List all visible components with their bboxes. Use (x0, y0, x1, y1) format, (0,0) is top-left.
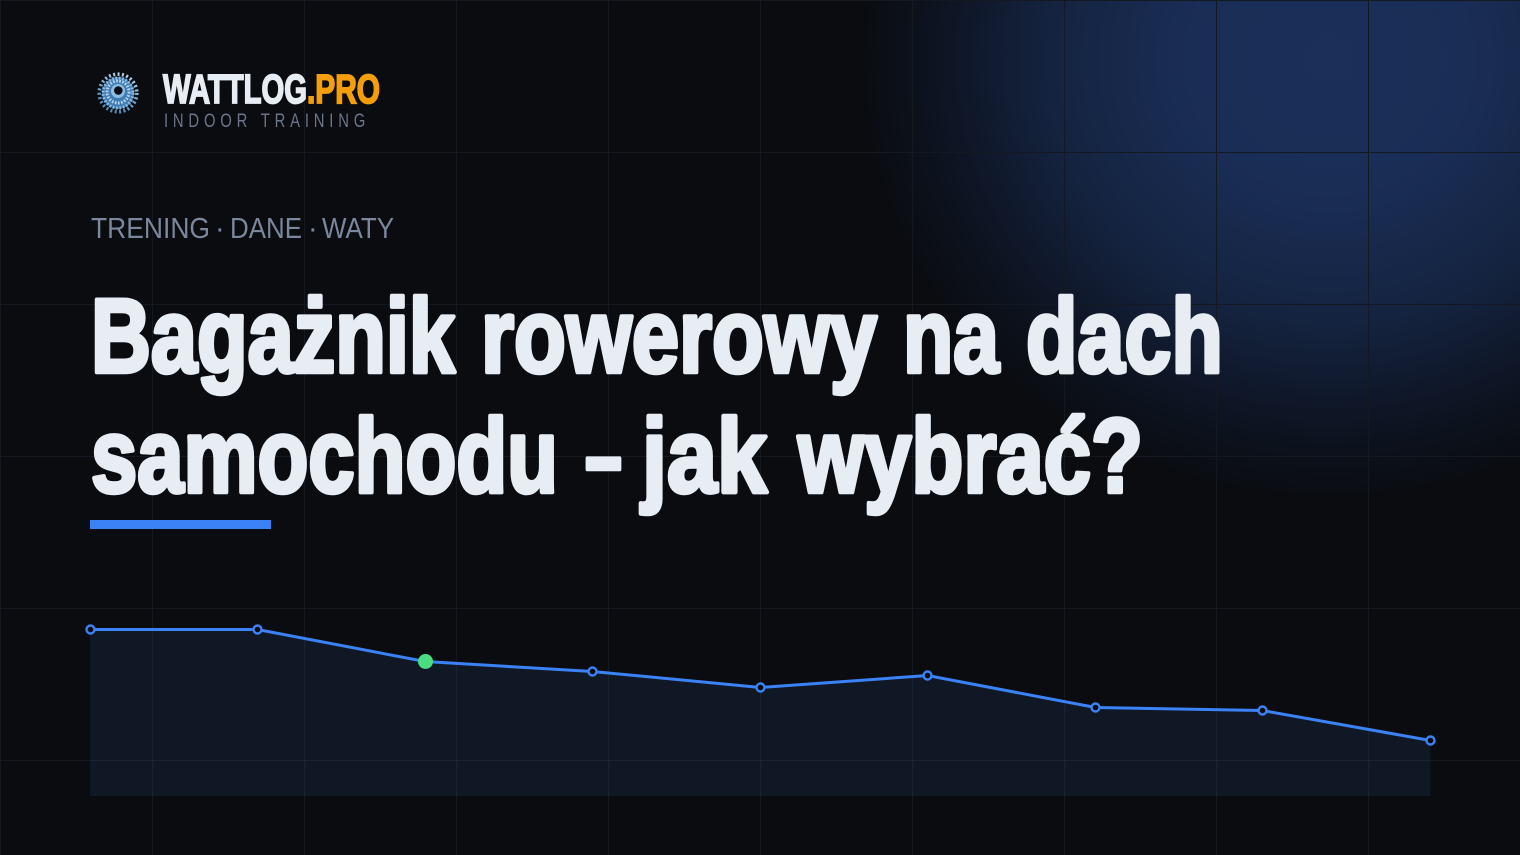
title line 2: wybrać? (797, 398, 1143, 515)
brand name: WATTLOG (163, 66, 307, 112)
title accent underline (90, 520, 271, 529)
title line 1 (91, 278, 1223, 395)
brand subtitle: INDOOR TRAINING (164, 110, 365, 131)
chart line (90, 630, 1430, 740)
title line 1: na (903, 278, 1000, 395)
category tagline: · (215, 213, 225, 245)
logo wordmark (163, 66, 380, 131)
category tagline: WATY (322, 213, 394, 245)
title (91, 278, 1223, 515)
category tagline: TRENING (91, 213, 210, 245)
highlighted data point (418, 654, 433, 669)
title line 2: samochodu (91, 398, 558, 515)
title line 1: rowerowy (481, 278, 877, 395)
category tagline (91, 213, 394, 245)
title line 2: jak (640, 398, 768, 515)
chart data points (86, 626, 1434, 744)
line chart (86, 626, 1434, 796)
logo: cassette sprocket icon (99, 74, 137, 112)
category tagline: · (308, 213, 318, 245)
title line 1: dach (1026, 278, 1223, 395)
brand name: .PRO (307, 66, 380, 112)
chart area fill (90, 630, 1430, 796)
title line 1: Bagażnik (91, 278, 455, 395)
title line 2: – (585, 398, 622, 515)
title line 2 (91, 398, 1143, 515)
category tagline: DANE (230, 213, 302, 245)
